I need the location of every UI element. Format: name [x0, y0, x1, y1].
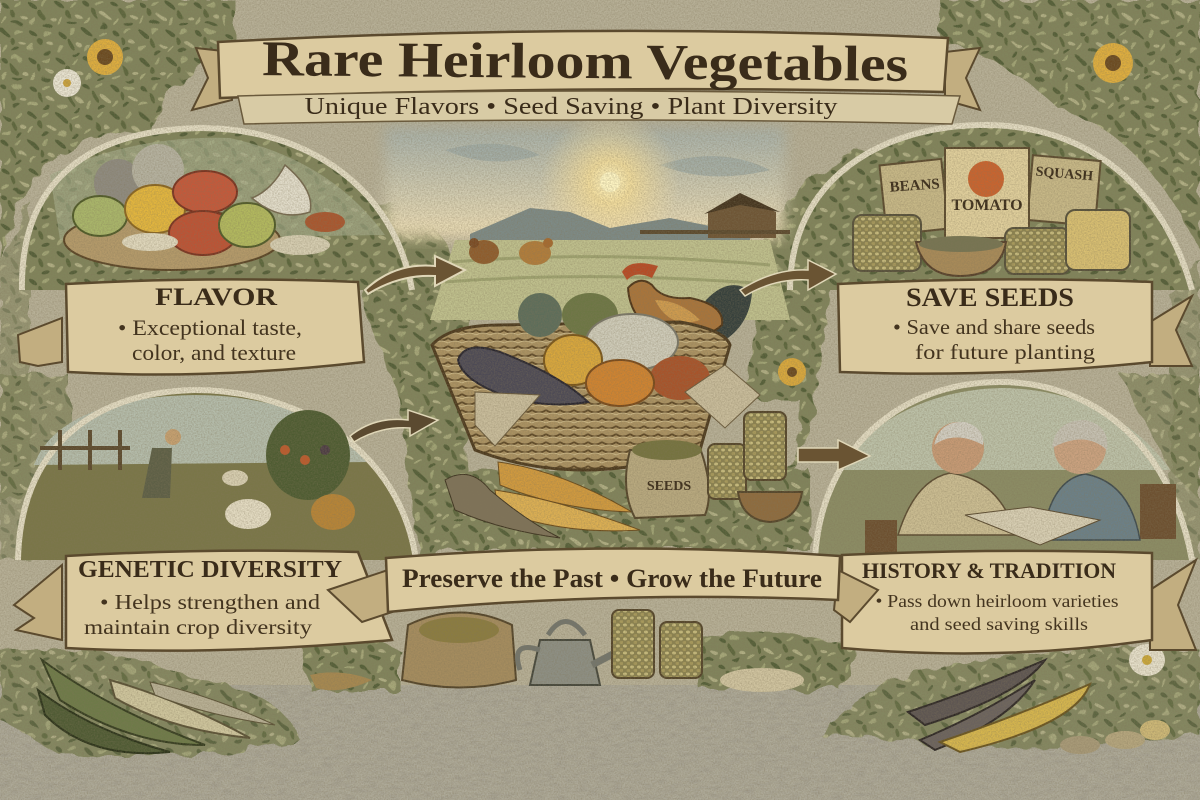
carrots and parsnips	[445, 462, 640, 538]
panel: save seeds illustration: BEANS	[889, 176, 940, 196]
panel: genetic diversity illustration	[18, 390, 416, 560]
vegetables bottom right	[908, 644, 1170, 754]
arrow: center to seeds	[740, 260, 836, 296]
panel: history label	[842, 551, 1196, 653]
panel: history illustration	[815, 382, 1192, 560]
panel: flavor illustration	[22, 128, 412, 290]
seed sack and jars: SEEDS	[647, 479, 691, 494]
save seeds heading: SAVE SEEDS	[906, 283, 1074, 312]
chickens in field	[469, 238, 553, 265]
history heading: HISTORY & TRADITION	[862, 558, 1116, 583]
corner florals	[53, 39, 1133, 386]
banner: preserve the past	[328, 548, 878, 622]
history text: • Pass down heirloom varieties	[876, 591, 1118, 611]
save seeds text: • Save and share seeds	[893, 315, 1095, 339]
subtitle: Unique Flavors • Seed Saving • Plant Diversity	[304, 94, 838, 120]
title: Rare Heirloom Vegetables	[262, 30, 908, 92]
panel: save seeds illustration: TOMATO	[951, 197, 1023, 214]
vegetables bottom left	[38, 660, 275, 753]
history text: and seed saving skills	[910, 614, 1088, 634]
genetic diversity text	[84, 590, 321, 639]
panel: flavor label	[18, 279, 364, 374]
flavor text: color, and texture	[132, 340, 296, 365]
title banner	[192, 30, 980, 124]
flavor heading: FLAVOR	[155, 284, 278, 311]
panel: save seeds illustration	[790, 125, 1192, 290]
genetic diversity text: • Helps strengthen and	[100, 590, 321, 614]
arrow: center to history	[798, 440, 870, 470]
basket with vegetables	[432, 293, 760, 470]
save seeds text	[893, 315, 1096, 364]
arrow: flavor to center	[365, 256, 465, 294]
genetic diversity text: maintain crop diversity	[84, 615, 313, 639]
panel: save seeds label	[838, 279, 1192, 374]
central farm landscape	[385, 112, 790, 320]
history text	[876, 591, 1118, 634]
seed sack and jars	[626, 412, 802, 522]
flavor text	[118, 315, 302, 365]
panel: genetic diversity label	[14, 551, 392, 651]
flavor text: • Exceptional taste,	[118, 315, 302, 340]
genetic diversity heading: GENETIC DIVERSITY	[78, 557, 342, 583]
panel: save seeds illustration: SQUASH	[1035, 165, 1094, 185]
burlap sack, watering can, jars	[310, 610, 804, 692]
rooster	[622, 263, 752, 342]
save seeds text: for future planting	[915, 340, 1096, 364]
arrow: diversity to center	[350, 410, 438, 442]
banner: preserve the past: Preserve the Past • Grow the Future	[402, 564, 822, 593]
